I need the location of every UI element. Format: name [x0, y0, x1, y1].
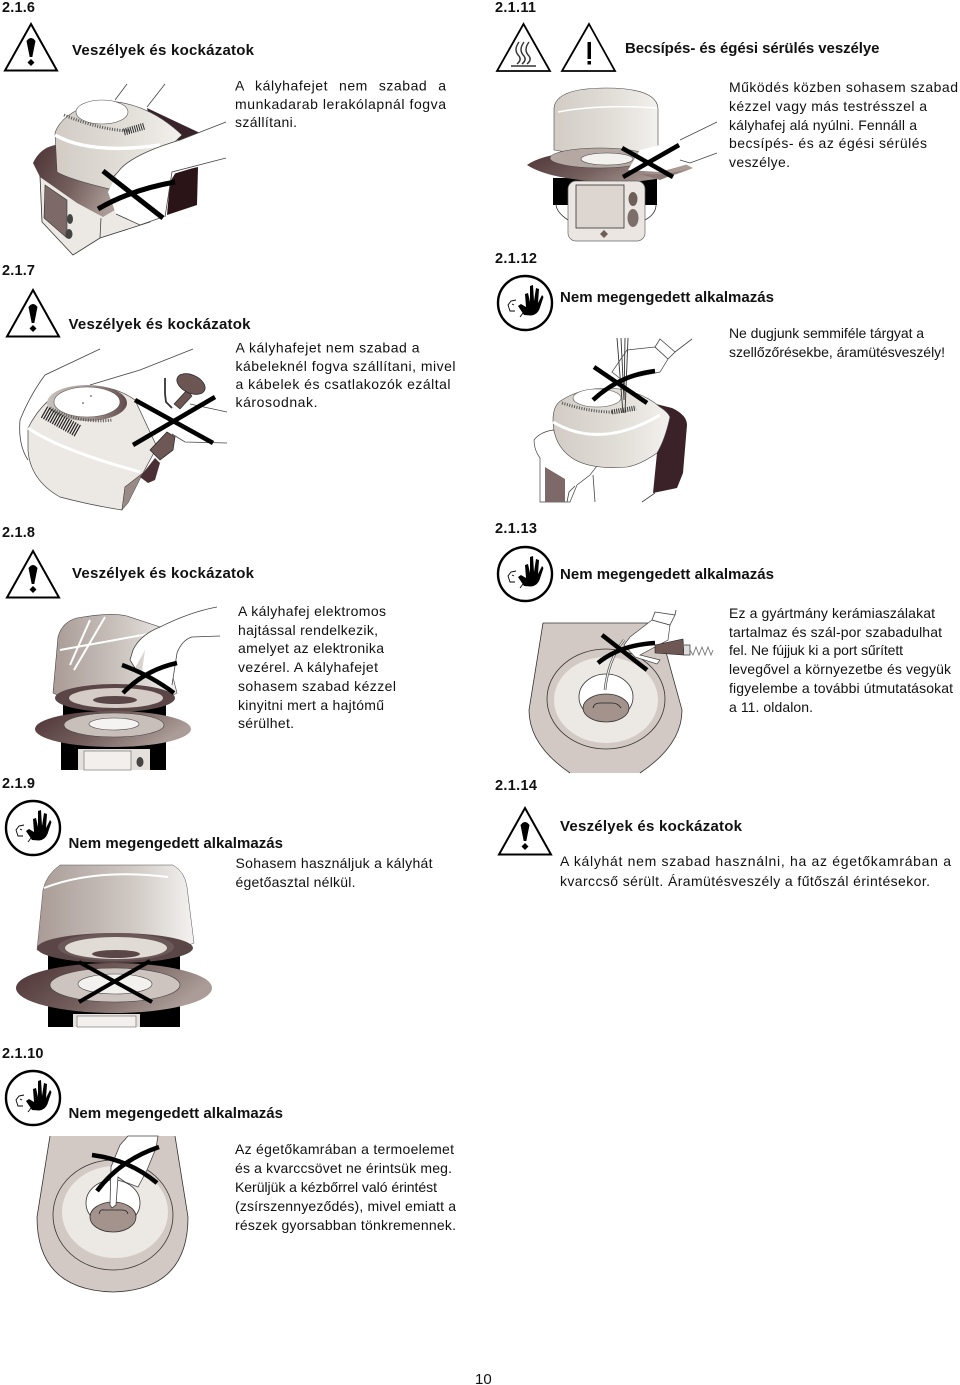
- icon: prohibition hand: [498, 547, 552, 601]
- icon: warning triangle: [7, 290, 59, 336]
- section number: 2.1.10: [2, 1046, 44, 1062]
- heading: Nem megengedett alkalmazás: [560, 289, 774, 306]
- text block: tartalmaz és szál-por szabadulhat: [729, 624, 942, 640]
- heading: Becsípés- és égési sérülés veszélye: [625, 40, 880, 57]
- text block: munkadarab lerakólapnál fogva: [235, 96, 446, 112]
- text block: a 11. oldalon.: [729, 699, 813, 715]
- text block: [729, 325, 945, 360]
- text block: [238, 603, 396, 731]
- text block: becsípés- és az égési sérülés: [729, 135, 927, 151]
- heading: Veszélyek és kockázatok: [72, 565, 255, 582]
- text block: A kályhafejet nem szabad a: [235, 78, 446, 94]
- section 2.1.7: [2, 263, 456, 510]
- heading: Veszélyek és kockázatok: [68, 316, 251, 333]
- text block: kábeleknél fogva szállítani, mivel: [236, 358, 456, 374]
- section 2.1.9: [2, 776, 433, 1027]
- text block: Sohasem használjuk a kályhát: [236, 855, 433, 871]
- no-go cross: [133, 397, 215, 445]
- text block: veszélye.: [729, 154, 790, 170]
- text block: figyelembe a további útmutatásokat: [729, 680, 953, 696]
- heading: Nem megengedett alkalmazás: [68, 835, 283, 852]
- text block: Kerüljük a kézbőrrel való érintést: [235, 1179, 437, 1195]
- text block: kvarccső sérült. Áramütésveszély a fűtőszál érintésekor.: [560, 873, 930, 889]
- text block: Ez a gyártmány kerámiaszálakat: [729, 605, 935, 621]
- text block: A kályhafejet nem szabad a: [236, 340, 420, 356]
- illustration: opening the head by hand: [35, 607, 220, 770]
- text block: szellőzőrésekbe, áramütésveszély!: [729, 344, 945, 360]
- no-go cross: [98, 171, 175, 218]
- text block: sohasem szabad kézzel: [238, 678, 396, 694]
- section 2.1.8: [2, 525, 396, 770]
- illustration: touching the thermocouple: [37, 1136, 188, 1292]
- section number: 2.1.13: [495, 521, 537, 537]
- section 2.1.12: [495, 251, 945, 502]
- section number: 2.1.9: [2, 776, 35, 792]
- text block: hajtással rendelkezik,: [238, 622, 378, 638]
- icon: prohibition hand: [6, 1071, 60, 1125]
- illustration: blowing out fibre dust: [529, 610, 713, 773]
- no-go cross: [622, 145, 679, 177]
- section 2.1.14: [495, 778, 951, 889]
- icon: warning triangle: [499, 808, 551, 854]
- text block: vezérel. A kályhafejet: [238, 659, 378, 675]
- text block: [236, 855, 433, 890]
- text block: kézzel vagy más testrésszel a: [729, 98, 927, 114]
- section 2.1.10: [2, 1046, 456, 1292]
- text block: A kályhát nem szabad használni, ha az égetőkamrában a: [560, 853, 951, 869]
- text block: égetőasztal nélkül.: [236, 874, 356, 890]
- illustration: reaching under the head: [527, 88, 717, 241]
- text block: [235, 1141, 456, 1233]
- icon: hot surface triangle: [497, 24, 550, 71]
- text block: sérülhet.: [238, 715, 294, 731]
- section 2.1.11: [495, 0, 958, 241]
- text block: a kábelek és csatlakozók ezáltal: [236, 376, 450, 392]
- text block: levegővel a környezetbe és vegyük: [729, 661, 952, 677]
- text block: Ne dugjunk semmiféle tárgyat a: [729, 325, 924, 341]
- text block: [729, 79, 958, 170]
- text block: károsodnak.: [236, 394, 318, 410]
- section 2.1.6: [2, 0, 446, 255]
- no-go cross: [92, 1147, 159, 1191]
- no-go cross: [598, 635, 655, 670]
- icon: warning triangle: [7, 551, 59, 598]
- section number: 2.1.11: [495, 0, 536, 16]
- heading: Veszélyek és kockázatok: [72, 42, 255, 59]
- text block: kinyitni mert a hajtómű: [238, 697, 384, 713]
- no-go cross: [79, 961, 152, 1002]
- text block: kályhafej alá nyúlni. Fennáll a: [729, 117, 917, 133]
- section number: 2.1.7: [2, 263, 35, 279]
- icon: warning triangle: [5, 24, 57, 70]
- illustration: inserting tweezers into vents: [534, 338, 692, 502]
- icon: warning triangle: [562, 24, 615, 71]
- no-go cross: [122, 663, 177, 693]
- text block: Működés közben sohasem szabad: [729, 79, 958, 95]
- text block: részek gyorsabban tönkremennek.: [235, 1217, 456, 1233]
- text block: [235, 78, 446, 130]
- text block: [236, 340, 456, 410]
- text block: [729, 605, 953, 715]
- no-go cross: [593, 367, 655, 403]
- icon: prohibition hand: [498, 276, 552, 330]
- icon: prohibition hand: [6, 801, 60, 855]
- section number: 2.1.8: [2, 525, 35, 541]
- text block: fel. Ne fújjuk ki a port sűrített: [729, 642, 903, 658]
- illustration: lifting the head by the tray: [33, 84, 226, 255]
- text block: (zsírszennyeződés), mivel emiatt a: [235, 1198, 456, 1214]
- illustration: lifting the head by the cables: [20, 349, 227, 510]
- section 2.1.13: [495, 521, 953, 773]
- illustration: kiln without firing table: [16, 865, 212, 1027]
- section number: 2.1.6: [2, 0, 35, 16]
- text block: és a kvarccsövet ne érintsük meg.: [235, 1160, 452, 1176]
- text block: szállítani.: [235, 114, 297, 130]
- text block: [560, 853, 951, 889]
- heading: Veszélyek és kockázatok: [560, 818, 743, 835]
- text block: Az égetőkamrában a termoelemet: [235, 1141, 454, 1157]
- heading: Nem megengedett alkalmazás: [560, 566, 774, 583]
- section number: 2.1.14: [495, 778, 537, 794]
- section number: 2.1.12: [495, 251, 537, 267]
- text block: A kályhafej elektromos: [238, 603, 386, 619]
- text block: amelyet az elektronika: [238, 640, 384, 656]
- heading: Nem megengedett alkalmazás: [68, 1105, 283, 1122]
